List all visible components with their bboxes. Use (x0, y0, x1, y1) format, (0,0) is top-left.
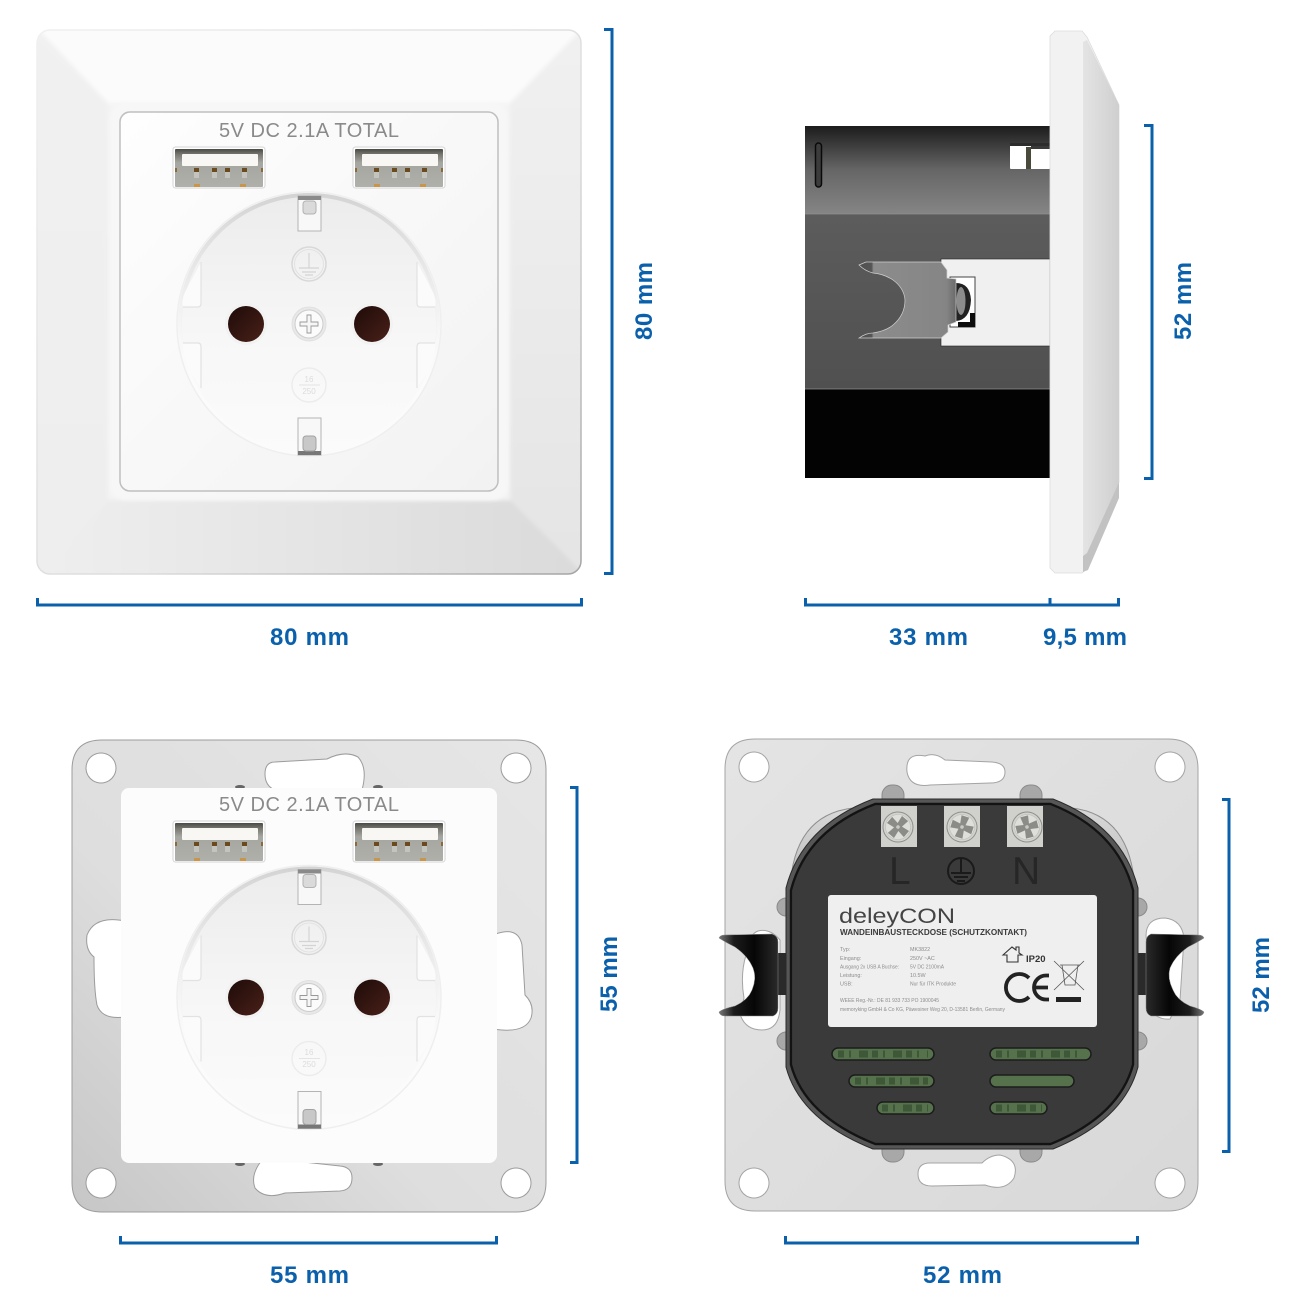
IP rating: IP20 (1026, 954, 1046, 965)
schuko socket recess (177, 192, 441, 456)
cover side strip (1050, 31, 1119, 573)
mounting plate (725, 739, 1198, 1211)
panel: side view (805, 31, 1119, 573)
value 9,5 mm: 9,5 mm (1043, 624, 1127, 651)
USB port left (173, 821, 265, 862)
dimension: rear width (786, 1236, 1138, 1289)
bracket (1144, 126, 1152, 478)
vents (832, 1048, 1091, 1114)
spec values: MK3822 (910, 947, 930, 953)
dimension: side height (1144, 126, 1197, 478)
value: 52 mm (923, 1262, 1002, 1289)
brand: deleyCON (839, 905, 955, 928)
icon: house (1003, 947, 1022, 962)
marking N: N (1012, 850, 1040, 893)
schuko socket recess (177, 866, 441, 1130)
dimension: panel height (570, 788, 623, 1162)
value: 55 mm (596, 936, 623, 1012)
cover bottom bevel (1083, 482, 1119, 572)
bracket (786, 1236, 1138, 1243)
dimension: panel width (120, 1236, 496, 1289)
spec values: 250V ~AC (910, 956, 935, 962)
CE mark (1006, 974, 1049, 1001)
spec values: 5V DC 2100mA (910, 964, 944, 970)
black body (791, 804, 1133, 1144)
housing middle band (805, 214, 1051, 389)
value 33 mm: 33 mm (889, 624, 968, 651)
value: 52 mm (1248, 937, 1275, 1013)
printed rating text: 5V DC 2.1A TOTAL (219, 794, 399, 816)
icon: crossed bin (1054, 961, 1084, 990)
mounting screw window (950, 277, 975, 327)
body rim (786, 799, 1138, 1149)
terminal earth (943, 806, 981, 847)
rating mark: 16 (305, 1048, 314, 1057)
small slot (816, 143, 822, 187)
spec values: 10.5W (910, 973, 926, 979)
terminal N (1007, 806, 1045, 847)
spec names: Typ: (840, 947, 850, 953)
bracket (570, 788, 577, 1162)
panel: rear view (719, 739, 1204, 1211)
label (828, 895, 1097, 1027)
bracket (120, 1236, 496, 1243)
circuit board parts (838, 1054, 1085, 1108)
spec names: Ausgang 2x USB A Buchse: (840, 964, 899, 970)
left metal clip (719, 934, 778, 1016)
dimension: side depth (806, 598, 1127, 651)
dimension: front height (604, 30, 658, 574)
spec names (840, 947, 899, 988)
rating mark voltage: 250 (302, 1060, 316, 1069)
value: 80 mm (631, 262, 658, 340)
housing bottom band (805, 389, 1051, 478)
band highlight lines (805, 214, 1050, 389)
white strip (941, 259, 1050, 346)
printed rating text: 5V DC 2.1A TOTAL (219, 120, 399, 142)
rating mark voltage: 250 (302, 387, 316, 396)
mounting plate (72, 740, 546, 1212)
spec values (910, 947, 956, 988)
metal clip (859, 262, 956, 338)
value: 55 mm (270, 1262, 349, 1289)
spec names: Leistung: (840, 973, 862, 979)
plate tabs (235, 785, 383, 1166)
address line: memoryking GmbH & Co KG, Päwesiner Weg 20, D-13581 Berlin, Germany (840, 1007, 1005, 1013)
bracket (38, 598, 582, 605)
cover plate outline (37, 30, 581, 574)
metal tabs (777, 785, 1147, 1162)
bevel faces of cover plate (38, 34, 580, 574)
cover bevel (1083, 40, 1119, 556)
product name: WANDEINBAUSTECKDOSE (SCHUTZKONTAKT) (840, 927, 1027, 937)
USB port right (353, 147, 445, 188)
panel: front view on mounting plate (72, 740, 546, 1212)
bracket (1222, 800, 1229, 1152)
window upper (1010, 143, 1050, 169)
spec names: USB: (840, 982, 853, 988)
marking L: L (889, 850, 911, 893)
right metal clip (1146, 934, 1204, 1016)
panel: front view with cover frame (36, 29, 582, 575)
spec names: Eingang: (840, 956, 861, 962)
dimension: front width (38, 598, 582, 651)
USB port right (353, 821, 445, 862)
housing top band (805, 126, 1051, 214)
terminal L (877, 806, 919, 848)
rating mark: 16 (305, 375, 314, 384)
marking earth (948, 858, 974, 884)
inner face panel (120, 112, 498, 491)
bracket (806, 598, 1118, 605)
dimension: rear height (1222, 800, 1275, 1152)
bracket behind body (790, 808, 1135, 890)
USB port left (173, 147, 265, 188)
value: 52 mm (1170, 262, 1197, 340)
clip bar behind body (770, 953, 1155, 995)
spec values: Nur für ITK Produkte (910, 982, 956, 988)
WEEE bar (1056, 997, 1081, 1002)
vent slots (832, 1048, 1091, 1114)
registration line: WEEE Reg.-Nr.: DE 81 933 733 PO 1900045 (840, 998, 939, 1004)
value: 80 mm (270, 624, 349, 651)
face panel (121, 788, 497, 1163)
raised inner frame (110, 103, 508, 500)
bracket (604, 30, 612, 574)
